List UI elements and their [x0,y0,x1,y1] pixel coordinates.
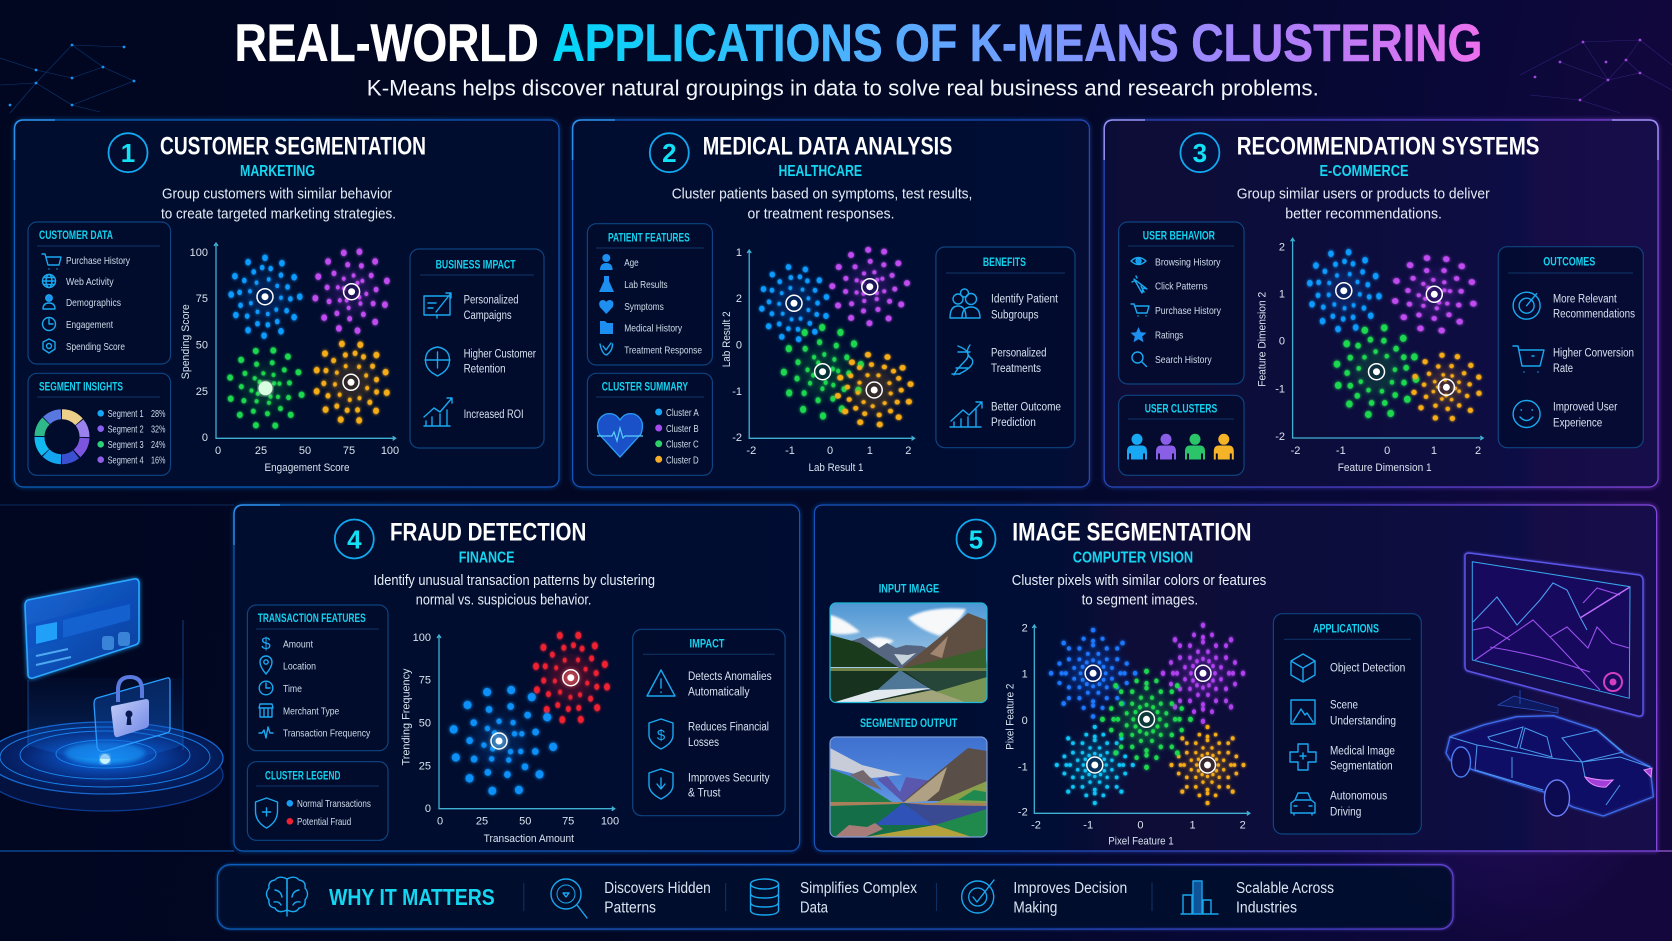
outcomes box: Higher Conversion [1553,347,1634,359]
heading: CUSTOMER SEGMENTATION [160,132,426,160]
description: Group similar users or products to deliver [1237,186,1490,202]
icon: location pin [260,656,272,674]
icon: object cube [1291,654,1315,682]
scatter chart: pixel features: 0 [1022,715,1028,727]
business impact box: Retention [464,363,506,375]
cluster: cyan [1057,727,1133,803]
scatter chart: transactions: Transaction Amount [484,833,574,845]
patient features box: PATIENT FEATURES [608,233,690,245]
donut legend: 28% [151,408,166,420]
user behavior box [1119,222,1244,384]
cluster legend box: Potential Fraud [297,816,351,828]
transaction features box [247,605,388,751]
donut legend: Segment 4 [108,454,144,466]
icon: patient group [950,289,980,318]
scatter chart: feature dimensions: 1 [1431,445,1437,457]
cluster summary box: CLUSTER SUMMARY [602,382,688,394]
description [672,186,972,222]
applications box: Scene [1330,700,1358,712]
scatter chart: lab results: -1 [732,386,742,398]
scatter chart: engagement vs spending: 50 [299,445,311,457]
icon: click cursor [1132,276,1147,293]
network decoration: top right [1520,40,1672,113]
icon: cart [1513,346,1544,372]
benefits box: Identify Patient [991,294,1059,306]
icon: star [1130,327,1146,342]
scatter chart: feature dimensions: 1 [1279,289,1285,301]
icon: score badge [43,339,55,353]
scatter chart: lab results: 2 [905,445,911,457]
cluster: green [769,309,877,433]
benefits box: Better Outcome [991,402,1061,414]
impact box [633,629,785,816]
scatter chart: pixel features: 2 [1240,819,1246,831]
wireframe car [1446,716,1653,816]
icon: heart [599,300,613,314]
number badge 2 [650,133,689,172]
user behavior box: Click Patterns [1155,281,1208,293]
icon: padlock [94,677,170,751]
number badge 5: 5 [969,524,983,554]
impact box: Detects Anomalies [688,671,772,683]
description: Group customers with similar behavior [162,186,392,202]
number badge 3 [1180,133,1219,172]
scatter chart: engagement vs spending: 75 [343,445,355,457]
cluster: blue [1305,247,1384,335]
scatter chart: engagement vs spending: Spending Score [180,304,192,379]
donut legend: 24% [151,439,166,451]
panel: medical data analysis [573,120,1089,487]
scatter chart: transactions: 100 [413,632,431,644]
scatter chart: pixel features [1005,622,1250,848]
cluster: green [218,337,313,439]
scatter chart: feature dimensions: -2 [1291,445,1300,457]
outcomes box: Experience [1553,417,1602,429]
scatter chart: transactions: 50 [519,815,531,827]
patient features box: Age [624,257,639,269]
icon: car [1291,793,1315,815]
outcomes box: Rate [1553,363,1573,375]
scatter chart: pixel features: 1 [1190,819,1196,831]
description: to create targeted marketing strategies. [161,206,396,222]
scatter chart: lab results: Lab Result 1 [808,462,864,474]
scatter chart: feature dimensions: 2 [1279,242,1285,254]
scatter chart: pixel features: -1 [1083,819,1093,831]
scatter chart: feature dimensions: Feature Dimension 1 [1338,462,1432,474]
icon: heart with pulse [597,414,643,457]
scatter chart: pixel features: 1 [1022,668,1028,680]
scatter chart: pixel features: 2 [1022,622,1028,634]
scatter chart: lab results: 2 [736,293,742,305]
donut legend: Segment 2 [108,424,144,436]
icon: check shield [600,343,612,355]
icon: medical cross [1290,744,1316,770]
scatter chart: feature dimensions: -1 [1336,445,1346,457]
scatter chart: engagement vs spending: 0 [202,432,208,444]
customer data box: Demographics [66,297,121,309]
cluster: orange [1172,727,1244,803]
number badge 2: 2 [662,138,677,168]
description [161,186,396,222]
icon: magnifier [1132,352,1146,366]
icon: folder [600,321,613,334]
scatter chart: lab results: 0 [827,445,833,457]
transaction features box: Location [283,661,316,673]
icon: globe [42,274,56,288]
transaction features box: Merchant Type [283,705,339,717]
user behavior box: Search History [1155,354,1212,366]
impact box: Automatically [688,686,750,698]
input image: INPUT IMAGE [879,584,939,596]
user behavior box: Purchase History [1155,305,1222,317]
icon: shield dollar: $ [657,727,666,744]
scatter chart: transactions: 0 [437,815,443,827]
cluster legend: Cluster B [666,423,699,435]
domain label: FINANCE [459,550,515,567]
benefits box: Prediction [991,417,1036,429]
customer data box: CUSTOMER DATA [39,230,113,242]
donut legend [97,408,166,466]
scatter chart: transactions: 75 [562,815,574,827]
scatter chart: transactions: 50 [419,717,431,729]
domain label: COMPUTER VISION [1073,550,1193,567]
title: REAL-WORLD [235,14,539,73]
band lines [0,505,1672,851]
impact box: IMPACT [690,638,724,650]
scatter chart: engagement vs spending: 100 [190,247,208,259]
cluster legend: Cluster A [666,407,699,419]
description: or treatment responses. [748,206,894,222]
customer data box: Spending Score [66,341,125,353]
user behavior box: USER BEHAVIOR [1143,230,1216,242]
transaction features box: Amount [283,638,313,650]
description [374,573,655,608]
description: normal vs. suspicious behavior. [416,592,591,608]
outcomes box [1498,247,1643,448]
heading: IMAGE SEGMENTATION [1012,519,1252,547]
scatter chart: feature dimensions: 2 [1475,445,1481,457]
scatter chart: lab results: Lab Result 2 [721,311,733,367]
scatter chart: pixel features: 0 [1137,819,1143,831]
people icons [1127,434,1234,460]
icon: growth bars [950,402,982,427]
donut legend: 32% [151,424,166,436]
panel: recommendation systems [1104,120,1658,487]
segmented output image: SEGMENTED OUTPUT [860,718,957,730]
icon: shield dollar [649,719,673,749]
benefits box: Personalized [991,347,1046,359]
icon: clock [42,318,56,330]
scatter chart: transactions: 25 [476,815,488,827]
scatter chart: engagement vs spending: 0 [215,445,221,457]
benefits box: Treatments [991,363,1041,375]
donut legend: 16% [151,454,166,466]
number badge 1 [108,133,148,172]
icon: person [43,295,55,309]
item: discovers hidden patterns [551,879,711,918]
segment insights box: SEGMENT INSIGHTS [39,382,123,394]
domain label: E-COMMERCE [1320,163,1409,180]
item: simplifies complex data: Simplifies Complex [800,880,917,897]
scatter chart: feature dimensions: 0 [1384,445,1390,457]
cluster: orange [307,335,396,430]
panel: image segmentation [814,505,1657,851]
scatter chart: feature dimensions: -2 [1275,431,1285,443]
business impact box: BUSINESS IMPACT [436,259,516,271]
cluster: purple [315,252,387,331]
illustration: fraud security hologram [0,579,223,811]
outcomes box: More Relevant [1553,293,1617,305]
applications box: APPLICATIONS [1313,623,1379,635]
scatter chart: lab results: 1 [867,445,873,457]
scatter chart: engagement vs spending: 50 [196,340,208,352]
business impact box: Higher Customer [464,348,536,360]
benefits box: BENEFITS [983,257,1026,269]
item: discovers hidden patterns: Discovers Hidden [604,880,711,897]
cluster: blue [752,257,837,350]
impact box: Improves Security [688,772,770,784]
item: simplifies complex data [750,879,917,916]
benefits box [936,247,1075,448]
impact box: Losses [688,737,719,749]
user clusters box [1119,395,1244,475]
network decoration: top left [0,45,134,113]
outcomes box: OUTCOMES [1543,257,1596,269]
subtitle: K-Means helps discover natural groupings in data to solve real business and research problems. [367,76,1319,100]
icon: shield [256,798,278,828]
item: simplifies complex data: Data [800,900,828,916]
patient features box: Symptoms [624,301,664,313]
outcomes box: Improved User [1553,402,1618,414]
description: better recommendations. [1285,206,1442,222]
cluster legend box [247,762,388,840]
item: improves decision making [962,880,1127,916]
customer data box: Web Activity [66,276,114,288]
icon: scene picture [1291,700,1315,724]
scatter chart: lab results [721,244,927,474]
impact box: Reduces Financial [688,722,769,734]
cluster: normal blue [438,674,567,807]
item: discovers hidden patterns: Patterns [604,900,656,916]
cluster: purple [1163,625,1243,721]
scatter chart: engagement vs spending: Engagement Score [264,462,350,474]
cluster: green [1325,316,1429,428]
customer data box [28,222,170,364]
title [235,14,1482,73]
applications box [1273,614,1421,834]
cluster legend box: CLUSTER LEGEND [265,770,340,782]
scatter chart: transactions: 0 [425,803,431,815]
applications box: Medical Image [1330,745,1395,757]
scatter chart: pixel features: Pixel Feature 2 [1005,684,1017,750]
business impact box [410,249,544,448]
icon: target [1513,292,1540,319]
segmented output image [830,718,987,837]
customer data box: Engagement [66,319,113,331]
cluster summary box [587,373,712,475]
heading: FRAUD DETECTION [390,519,586,547]
illustration: monitor and car [1446,553,1653,816]
icon: dollar: $ [261,634,271,653]
scatter chart: engagement vs spending: 25 [255,445,267,457]
user behavior box: Ratings [1155,330,1183,342]
user behavior box: Browsing History [1155,256,1221,268]
icon: campaign board [424,293,451,318]
icon: dna [952,345,973,375]
icon: shield check [649,769,673,799]
patient features box: Medical History [624,323,683,335]
title: APPLICATIONS OF K-MEANS CLUSTERING [552,14,1482,73]
customer data box: Purchase History [66,255,131,267]
icon: growth bars [424,398,452,426]
segment insights box [28,373,170,475]
impact box: & Trust [688,788,721,800]
icon: brain [266,877,308,916]
cluster: orange [1402,343,1491,431]
cluster: blue [231,258,300,336]
icon: cart [1131,304,1149,316]
donut chart [39,414,85,459]
scatter chart: lab results: -2 [746,445,756,457]
heading: RECOMMENDATION SYSTEMS [1237,132,1540,160]
patient features box [587,224,712,365]
number badge 4 [335,520,374,558]
patient features box: Lab Results [624,279,668,291]
benefits box: Subgroups [991,309,1039,321]
icon: cart [42,254,61,269]
donut legend: Segment 3 [108,439,144,451]
number badge 5 [956,520,996,558]
icon: age person [600,254,613,270]
cluster: blue [1051,630,1135,716]
icon: clock [259,681,273,695]
transaction features box: Time [283,683,302,695]
cluster: fraud red [528,626,614,729]
monitor with wireframe mountains [1465,553,1643,716]
scatter chart: feature dimensions: -1 [1275,384,1285,396]
number badge 4: 4 [347,524,362,554]
donut legend: Segment 1 [108,408,144,420]
scatter chart: transactions: 25 [419,761,431,773]
heading: WHY IT MATTERS [329,884,495,910]
input image [830,584,987,703]
transaction features box: Transaction Frequency [283,728,371,740]
domain label: MARKETING [240,163,315,180]
description: to segment images. [1082,592,1198,608]
number badge 1: 1 [121,138,135,168]
description: Identify unusual transaction patterns by clustering [374,573,655,589]
scatter chart: lab results: -1 [785,445,795,457]
cluster legend [655,407,699,466]
business impact box: Personalized [464,294,519,306]
scatter chart: pixel features: Pixel Feature 1 [1108,836,1174,848]
patient features box: Treatment Response [624,344,702,356]
description [1237,186,1490,222]
number badge 3: 3 [1193,138,1207,168]
icon: smile [1513,400,1540,428]
panel: customer segmentation [14,120,559,487]
applications box: Autonomous [1330,791,1387,803]
applications box: Object Detection [1330,662,1405,674]
scatter chart: transactions: Trending Frequency [400,668,412,766]
description [1012,573,1266,608]
cluster legend box: Normal Transactions [297,798,371,810]
icon: eye [1131,258,1146,264]
cluster legend: Cluster D [666,454,699,466]
description: Cluster pixels with similar colors or features [1012,573,1266,589]
scatter chart: engagement vs spending: 75 [196,293,208,305]
user clusters box: USER CLUSTERS [1145,404,1217,416]
icon: retention head [425,347,450,376]
description: Cluster patients based on symptoms, test results, [672,186,972,202]
panel: fraud detection [234,505,800,851]
scatter chart: engagement vs spending: 100 [381,445,399,457]
scatter chart: pixel features: -1 [1018,761,1028,773]
scatter chart: feature dimensions: 0 [1279,336,1285,348]
scatter chart: transactions [400,626,619,845]
item: scalable across industries [1181,880,1334,916]
cluster: purple [827,244,912,328]
applications box: Driving [1330,806,1361,818]
icon: warning [647,670,675,696]
scatter chart: lab results: -2 [732,432,742,444]
applications box: Segmentation [1330,761,1393,773]
business impact box: Increased ROI [464,409,524,421]
item: scalable across industries: Industries [1236,900,1297,916]
item: improves decision making: Making [1013,900,1057,916]
scatter chart: engagement vs spending: 25 [196,386,208,398]
scatter chart: feature dimensions: Feature Dimension 2 [1256,292,1268,387]
outcomes box: Recommendations [1553,309,1635,321]
scatter chart: pixel features: -2 [1018,807,1028,819]
domain label: HEALTHCARE [778,163,862,180]
scatter chart: lab results: 0 [736,340,742,352]
icon: flask [599,276,614,292]
cluster: orange [822,341,927,439]
applications box: Understanding [1330,715,1396,727]
icon: credit card [25,579,139,678]
cluster: purple [1380,244,1488,343]
item: scalable across industries: Scalable Across [1236,880,1334,897]
cluster: green [1102,671,1190,767]
scatter chart: pixel features: -2 [1031,819,1041,831]
heading: MEDICAL DATA ANALYSIS [703,132,952,160]
icon: merchant store [259,704,273,717]
scatter chart: transactions: 75 [419,674,431,686]
scatter chart: engagement vs spending [180,243,399,474]
scatter chart: lab results: 1 [736,247,742,259]
transaction features box: TRANSACTION FEATURES [258,613,366,625]
business impact box: Campaigns [464,310,512,322]
scatter chart: feature dimensions [1256,238,1491,474]
scatter chart: transactions: 100 [601,815,619,827]
cluster legend: Cluster C [666,439,699,451]
icon: pulse [259,727,273,738]
item: improves decision making: Improves Decision [1013,880,1127,897]
why it matters bar [218,865,1453,929]
